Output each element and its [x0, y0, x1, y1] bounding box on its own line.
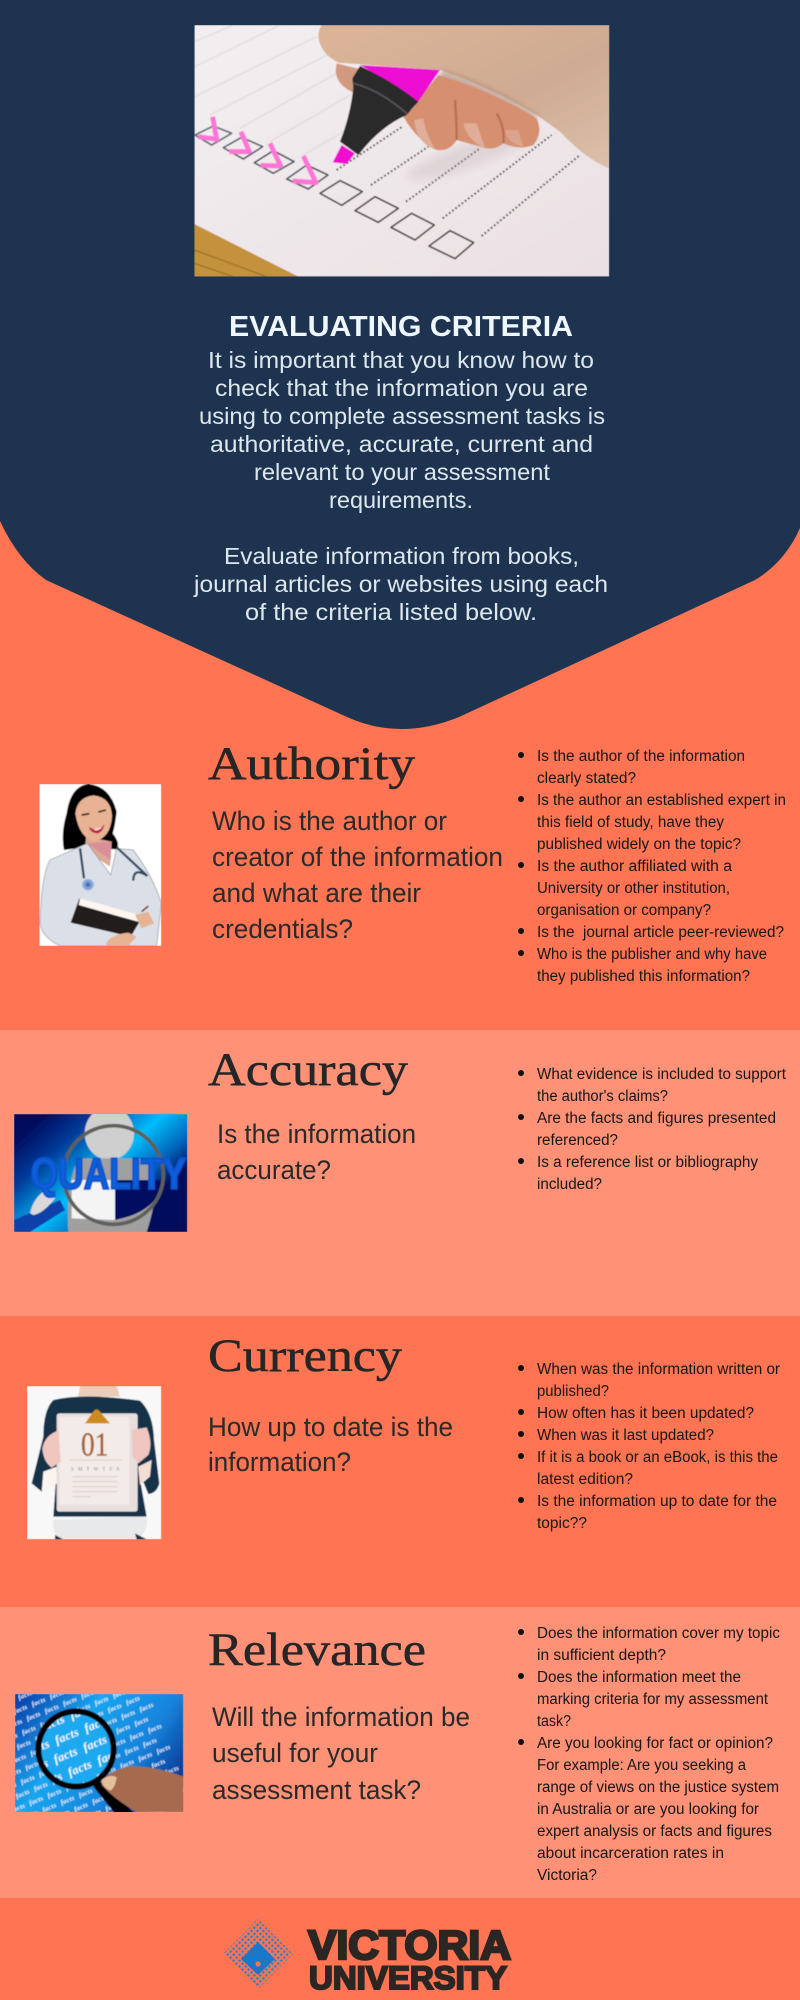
checklist: accuracy: included? [537, 1176, 602, 1193]
intro paragraph: relevant to your assessment [254, 459, 551, 485]
heading: relevance: Relevance [208, 1624, 426, 1676]
question: authority: Who is the author or [212, 806, 447, 836]
panel: authority [39, 738, 786, 985]
question: authority [212, 806, 503, 944]
checklist: relevance: Does the information cover my topic [537, 1625, 780, 1642]
checklist: authority: Is the author an established expert in [537, 792, 786, 809]
image: hand with magnifier over facts: facts facts facts facts [35, 1752, 151, 1810]
panel: relevance [0, 1607, 800, 1898]
footer: Victoria University logo [223, 1919, 511, 1996]
checklist: currency: Is the information up to date for the [537, 1493, 777, 1510]
evaluation instruction paragraph: of the criteria listed below. [245, 599, 537, 625]
checklist: authority: Is the author affiliated with a [537, 858, 732, 875]
checklist: currency: published? [537, 1383, 609, 1400]
heading: currency: Currency [208, 1330, 403, 1382]
checklist: authority [518, 748, 786, 985]
question: relevance: useful for your [212, 1738, 378, 1768]
checklist: accuracy: What evidence is included to support [537, 1066, 787, 1083]
intro paragraph: authoritative, accurate, current and [210, 431, 593, 457]
photo: person holding calendar: 01 [81, 1427, 108, 1464]
header panel [0, 0, 800, 729]
image: hand with magnifier over facts: facts facts facts facts [9, 1688, 125, 1746]
checklist: currency: If it is a book or an eBook, is this the [537, 1449, 778, 1466]
question: authority: and what are their [212, 878, 421, 908]
checklist: authority: they published this information? [537, 968, 750, 985]
checklist: relevance: range of views on the justice system [537, 1779, 779, 1796]
checklist: relevance: For example: Are you seeking a [537, 1757, 746, 1774]
question: relevance [212, 1702, 470, 1805]
question: relevance: Will the information be [212, 1702, 470, 1732]
question: accuracy [217, 1119, 416, 1185]
question: currency: information? [208, 1447, 351, 1477]
heading: authority: Authority [208, 738, 416, 790]
image: hand with magnifier over facts: facts facts facts facts [22, 1720, 138, 1778]
checklist: relevance: Does the information meet the [537, 1669, 741, 1686]
band background [0, 1607, 800, 1898]
checklist: authority: Is the journal article peer-reviewed? [537, 924, 784, 941]
checklist: authority: published widely on the topic? [537, 836, 741, 853]
checklist: authority: University or other institution, [537, 880, 730, 897]
image: hand with magnifier over facts: facts facts facts facts facts facts facts facts facts facts [0, 1779, 175, 1857]
checklist: currency: When was it last updated? [537, 1427, 714, 1444]
checklist: accuracy: referenced? [537, 1132, 618, 1149]
title: EVALUATING CRITERIA [229, 311, 573, 343]
checklist: accuracy: Are the facts and figures presented [537, 1110, 776, 1127]
checklist: accuracy: the author's claims? [537, 1088, 668, 1105]
image: hand with magnifier over facts: facts facts facts facts facts facts facts facts facts facts [9, 1786, 189, 1864]
question: relevance: assessment task? [212, 1775, 421, 1805]
checklist: authority: organisation or company? [537, 902, 711, 919]
checklist: currency: latest edition? [537, 1471, 633, 1488]
band background [0, 1030, 800, 1316]
question: currency: How up to date is the [208, 1412, 453, 1442]
intro paragraph: requirements. [329, 487, 473, 513]
checklist: authority: Is the author of the information [537, 748, 745, 765]
checklist: relevance [518, 1625, 780, 1884]
checklist: authority: this field of study, have they [537, 814, 724, 831]
evaluation instruction paragraph: journal articles or websites using each [193, 571, 608, 597]
evaluation instruction paragraph [193, 543, 608, 625]
checklist: currency: topic?? [537, 1515, 587, 1532]
checklist: relevance: in sufficient depth? [537, 1647, 666, 1664]
checklist: relevance: expert analysis or facts and figures [537, 1823, 772, 1840]
image: quality magnifier [14, 1107, 187, 1232]
checklist: relevance: marking criteria for my assessment [537, 1691, 769, 1708]
checklist: relevance: task? [537, 1713, 571, 1730]
image: hand with magnifier over facts: facts facts facts facts facts facts facts facts facts facts [1, 1765, 180, 1843]
image: hand with magnifier over facts: facts facts facts [36, 1745, 123, 1791]
checklist: authority: Who is the publisher and why have [537, 946, 767, 963]
checklist: accuracy: Is a reference list or bibliography [537, 1154, 758, 1171]
wordmark: UNIVERSITY [309, 1960, 507, 1996]
icon: halftone diamond [223, 1919, 293, 1989]
wordmark [308, 1922, 511, 1996]
checklist: accuracy [518, 1066, 787, 1193]
photo: highlighter ticking a checklist [194, 25, 609, 277]
question: currency [208, 1412, 453, 1477]
photo: person holding calendar: S M T W T F S [71, 1467, 120, 1472]
photo: person holding calendar [27, 1386, 161, 1539]
intro paragraph: It is important that you know how to [208, 347, 594, 373]
checklist: currency: How often has it been updated? [537, 1405, 754, 1422]
checklist: authority: clearly stated? [537, 770, 636, 787]
image: hand with magnifier over facts: facts facts facts facts facts facts facts facts facts facts [4, 1800, 184, 1878]
illustration: doctor holding a book [39, 784, 161, 946]
checklist: relevance: Victoria? [537, 1867, 597, 1884]
intro paragraph [199, 347, 605, 513]
checklist: currency: When was the information written or [537, 1361, 780, 1378]
checklist: currency [518, 1361, 780, 1532]
question: accuracy: accurate? [217, 1155, 331, 1185]
question: authority: credentials? [212, 914, 353, 944]
checklist: relevance: about incarceration rates in [537, 1845, 724, 1862]
checklist: relevance: Are you looking for fact or opinion? [537, 1735, 773, 1752]
navy pentagon background [0, 0, 800, 729]
question: accuracy: Is the information [217, 1119, 416, 1149]
intro paragraph: check that the information you are [215, 375, 588, 401]
question: authority: creator of the information [212, 842, 503, 872]
intro paragraph: using to complete assessment tasks is [199, 403, 605, 429]
image: hand with magnifier over facts [15, 1694, 184, 1812]
image: quality magnifier: QUALITY [31, 1151, 186, 1199]
heading: accuracy: Accuracy [208, 1044, 409, 1096]
evaluation instruction paragraph: Evaluate information from books, [224, 543, 579, 569]
image: hand with magnifier over facts: facts facts facts [23, 1713, 110, 1759]
wordmark: VICTORIA [308, 1922, 511, 1968]
checklist: relevance: in Australia or are you looking for [537, 1801, 759, 1818]
panel: accuracy [0, 1030, 800, 1316]
panel: currency [27, 1330, 780, 1539]
